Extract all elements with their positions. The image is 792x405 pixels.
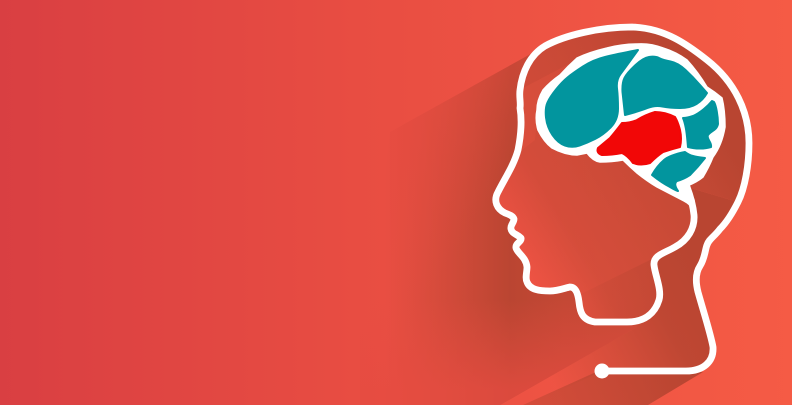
brain white silhouette bbox=[536, 44, 725, 212]
right brain lobe bbox=[683, 101, 718, 148]
cable end dot bbox=[594, 364, 610, 378]
top brain lobe bbox=[622, 57, 707, 115]
shadow inside the neck bbox=[500, 187, 738, 405]
fade of the long shadow toward the bottom bbox=[360, 282, 637, 405]
shadow band above the chin line bbox=[575, 258, 659, 322]
head outline bbox=[496, 27, 749, 371]
bottom brain lobe bbox=[652, 152, 705, 191]
lighter area inside the head, left of the brain bbox=[522, 58, 580, 150]
shadow inside the head bbox=[496, 27, 749, 322]
shadow below the cable line bbox=[523, 372, 703, 405]
long shadow left of the face bbox=[360, 46, 637, 405]
left brain lobe bbox=[546, 50, 638, 147]
fade of the long shadow toward the top bbox=[390, 46, 545, 350]
brain bbox=[536, 44, 725, 212]
red highlighted brain region bbox=[598, 112, 681, 164]
